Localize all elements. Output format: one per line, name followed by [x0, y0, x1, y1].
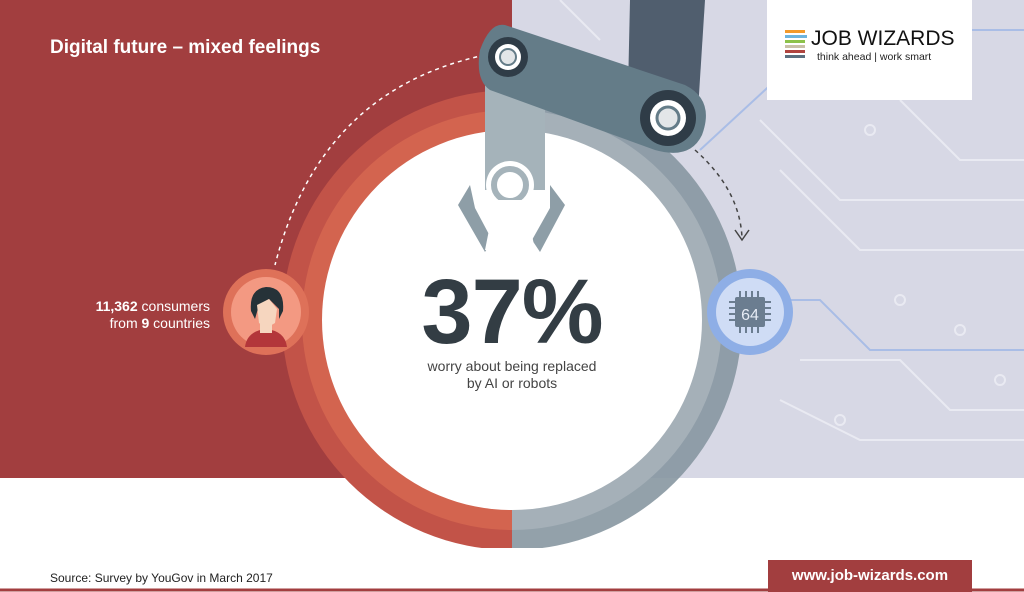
- url box: [768, 560, 972, 592]
- stat label: consumers: [96, 298, 210, 331]
- robot arm: [458, 0, 706, 252]
- title: Digital future – mixed feelings: [50, 37, 320, 58]
- caption: [428, 358, 596, 391]
- icon: chip: 64: [741, 307, 759, 324]
- logo box: [767, 0, 972, 100]
- caption: worry about being replaced: [428, 358, 596, 374]
- icon: chip: [707, 269, 793, 355]
- stat label: consumers: from 9 countries: [110, 315, 210, 331]
- big percentage: 37%: [421, 261, 603, 363]
- icon: person: [223, 269, 309, 355]
- logo stripes: [785, 30, 807, 58]
- icon: claw: [458, 161, 565, 252]
- logo text: JOB WIZARDS: [811, 27, 955, 50]
- source: Source: Survey by YouGov in March 2017: [50, 571, 273, 585]
- url box: www.job-wizards.com: [792, 567, 948, 584]
- stat label: consumers: 11,362 consumers: [96, 298, 210, 314]
- logo box: think ahead | work smart: [817, 51, 931, 63]
- caption: by AI or robots: [467, 375, 557, 391]
